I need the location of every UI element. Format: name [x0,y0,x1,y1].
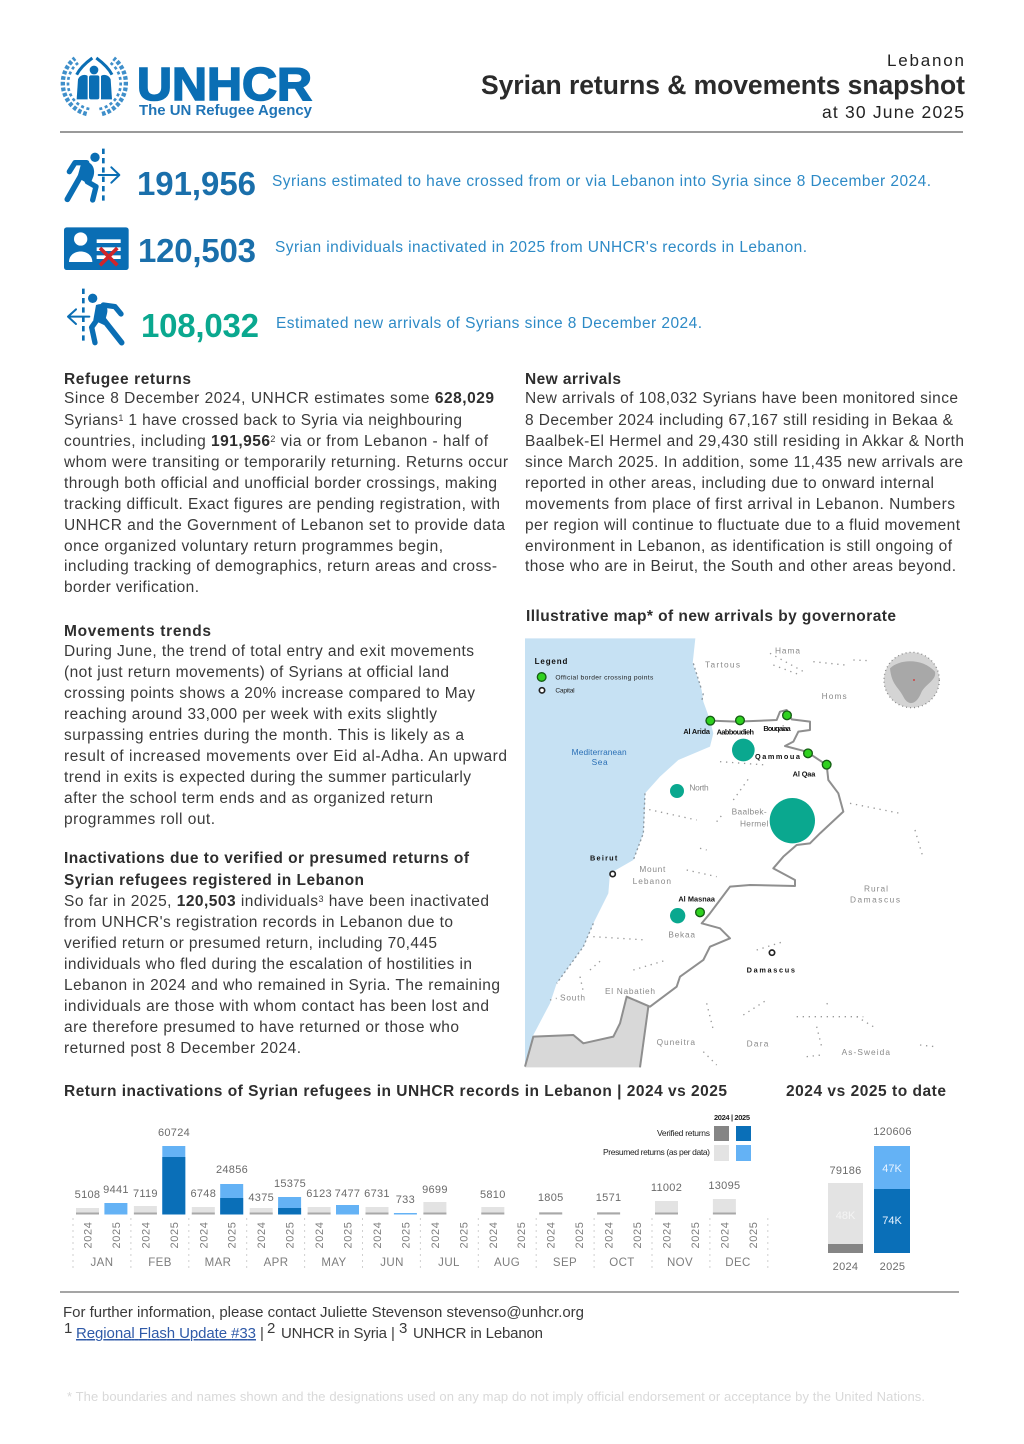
text block: new arrivals: those who are in Beirut, the South and other areas beyond. [525,558,956,575]
text block: refugee returns: tracking difficult. Exact figures are pending registration, with [64,496,500,513]
map legend [535,657,654,695]
month axis labels: APR [264,1257,288,1269]
map legend: Legend [535,657,567,666]
place labels: Mediterranean [572,747,627,757]
value labels: 6123 [306,1188,332,1200]
text block: inactivations [64,850,500,1057]
year axis labels: 2024 [719,1222,731,1248]
place labels: Quneitra [657,1037,695,1047]
place labels: Lebanon [633,876,671,886]
2024 bars [76,1199,736,1214]
totals and years: 2024 [833,1261,858,1273]
value labels: 11002 [651,1182,682,1194]
place labels: Damascus [747,966,795,975]
place labels: Beirut [590,854,618,863]
place labels: Aabboudieh [717,728,755,737]
value labels: 6731 [364,1188,390,1200]
year axis labels: 2024 [256,1222,268,1248]
text block: inactivations: So far in 2025, 120,503 individuals [64,893,318,910]
text block: movements trends: During June, the trend of total entry and exit movements [64,643,474,660]
legend: presumed: Presumed returns (as per data) [603,1147,710,1157]
text block: new arrivals: 8 December 2024 including 67,167 still residing in Bekaa & [525,412,954,429]
totals and years: 2025 [880,1261,905,1273]
text block: refugee returns: Since 8 December 2024, UNHCR estimates some 628,029 [64,390,494,407]
year axis labels: 2025 [516,1222,528,1248]
place labels: Dara [747,1039,769,1049]
footnotes: UNHCR in Lebanon [413,1325,543,1342]
month axis labels: NOV [667,1257,693,1269]
value labels [75,1127,740,1206]
text block: movements trends: result of increased movements over Eid al-Adha. An upward [64,748,507,765]
text block: new arrivals: since March 2025. In addition, some 11,435 new arrivals are [525,454,963,471]
text block: refugee returns: via or from Lebanon - half of [276,433,489,450]
text block: movements trends [64,623,507,828]
place labels: Damascus [850,895,900,905]
bar 2024 [828,1183,863,1253]
number: 120,503 [138,232,256,269]
description: Syrian individuals inactivated in 2025 from UNHCR's records in Lebanon. [275,239,807,256]
header: UNHCR logo [63,58,313,119]
value labels: 9699 [422,1184,448,1196]
text block: new arrivals: New arrivals of 108,032 Syrians have been monitored since [525,390,958,407]
heading: New arrivals [525,371,621,388]
year axis labels: 2024 [604,1222,616,1248]
month axis labels: DEC [725,1257,751,1269]
year axis labels: 2024 [430,1222,442,1248]
map: new arrivals by governorate [525,638,939,1067]
stacked chart: 2024 vs 2025 to date: 74K [882,1215,902,1227]
text block: movements trends: trend in exits is expected during the summer particularly [64,769,471,786]
text block: refugee returns: 2 [270,434,275,444]
year axis labels: 2025 [285,1222,297,1248]
place labels: North [689,783,709,793]
logo emblem: wreath and sheltering hands [63,58,126,114]
month axis labels: JUN [380,1257,404,1269]
2025 presumed returns [104,1146,417,1214]
footnote 2: 2 [267,1320,275,1337]
text block: movements trends: after the school term ends and as organized return [64,790,433,807]
text block: refugee returns: including tracking of demographics, return areas and cross- [64,558,497,575]
text block: new arrivals [525,371,964,575]
icon: person crossing border inward [68,289,122,344]
place labels: Al Qaa [793,769,816,778]
footnote 1: 1 [64,1320,72,1337]
place labels: Al Masnaa [678,895,716,904]
stacked chart: 2024 vs 2025 to date [828,1126,912,1273]
map legend: Official border crossing points [555,674,654,681]
capitals [539,688,775,955]
text block: inactivations: returned post 8 December 2024. [64,1040,301,1057]
stacked chart: 2024 vs 2025 to date: 47K [882,1163,902,1175]
heading: Movements trends [64,623,211,640]
country: Lebanon [887,51,964,70]
text block: new arrivals: movements from place of first arrival in Lebanon. Numbers [525,496,955,513]
footnotes [64,1320,543,1342]
footnotes: UNHCR in Syria [281,1325,388,1342]
legend: verified: Verified returns [657,1128,710,1138]
map disclaimer: * The boundaries and names shown and the designations used on any map do not imply official endorsement or acceptance by the United Nations. [67,1389,925,1404]
icon: person crossing border outward [67,149,119,203]
text block: refugee returns: through both official and unofficial border crossings, making [64,475,497,492]
year axis labels: 2025 [748,1222,760,1248]
year axis labels: 2025 [458,1222,470,1248]
date: at 30 June 2025 [822,102,964,122]
place labels: Tartous [705,659,740,669]
totals and years: 79186 [829,1165,862,1177]
text block: inactivations: individuals are those with whom contact has been lost and [64,998,489,1015]
place labels: Bouqaiaa [763,724,792,733]
report title: Syrian returns & movements snapshot [481,70,965,100]
month axis labels: MAR [205,1257,231,1269]
month axis labels: SEP [553,1257,577,1269]
text block: inactivations: individuals who fled during the escalation of hostilities in [64,956,472,973]
description: Syrians estimated to have crossed from or via Lebanon into Syria since 8 December 2024. [272,173,931,190]
value labels: 15375 [274,1178,306,1190]
KPI: new arrivals [68,289,702,344]
year axis labels: 2025 [400,1222,412,1248]
footnotes: | [260,1325,264,1342]
report title block [481,51,965,122]
place labels: As-Sweida [842,1047,890,1057]
sea [525,638,713,1067]
text block: refugee returns: UNHCR and the Government of Lebanon set to provide data [64,517,505,534]
month axis labels: JAN [91,1257,113,1269]
2024 verified returns base [76,1212,736,1214]
value labels: 6748 [190,1188,216,1200]
place labels: Homs [822,691,847,701]
year axis labels: 2024 [82,1222,94,1248]
footnote 3: 3 [399,1320,407,1337]
stacked chart: 2024 vs 2025 to date: 48K [836,1210,856,1222]
year axis labels: 2024 [198,1222,210,1248]
text block: refugee returns: 1 [118,413,123,423]
border [525,710,843,1067]
text block: refugee returns: once organized voluntary return programmes begin, [64,538,443,555]
year axis labels: 2025 [111,1222,123,1248]
value labels: 24856 [216,1164,248,1176]
chart heading: to date: 2024 vs 2025 to date [786,1083,946,1100]
month axis labels: OCT [609,1257,635,1269]
value labels: 733 [396,1194,415,1206]
map legend: Capital [555,688,575,695]
place labels: Al Arida [683,727,711,736]
month axis labels: JUL [438,1257,460,1269]
place labels: Bekaa [668,930,695,940]
text block: inactivations: Lebanon in 2024 and who remained in Syria. The remaining [64,977,500,994]
value labels: 9441 [103,1184,129,1196]
place labels: El Nabatieh [605,986,655,996]
year axis labels: 2024 [662,1222,674,1248]
month axis labels: AUG [494,1257,520,1269]
year axis labels: 2025 [227,1222,239,1248]
text block: new arrivals: environment in Lebanon, as identification is still ongoing of [525,538,953,555]
proportional bubbles [670,739,815,923]
2025 verified returns [162,1157,301,1214]
text block: inactivations: have been inactivated [324,893,489,910]
map heading: Illustrative map* of new arrivals by governorate [526,608,896,625]
heading: Inactivations due to verified or presumed returns of [64,850,470,867]
place labels: South [560,993,585,1003]
text block: new arrivals: reported in other areas, including due to onward internal [525,475,934,492]
place labels: Hermel [740,818,768,828]
icon: ID card with red cross [64,227,129,270]
text block: inactivations: verified return or presumed return, including 70,445 [64,935,437,952]
year axis labels: 2025 [169,1222,181,1248]
globe inset [884,652,939,708]
text block: refugee returns: 1 have crossed back to Syria via neighbouring [124,412,462,429]
text block: movements trends: reaching around 33,000 per week with exits slightly [64,706,437,723]
value labels: 5108 [75,1189,100,1201]
text block: new arrivals: per region will continue to fluctuate due to a fluid movement [525,517,961,534]
chart legend [603,1113,751,1161]
value labels: 60724 [158,1127,190,1139]
text block: movements trends: (not just return movements) of Syrians at official land [64,664,449,681]
text block: movements trends: programmes roll out. [64,811,215,828]
text block: refugee returns: countries, including 191,956 [64,433,270,450]
value labels: 1805 [538,1192,564,1204]
legend header: 2024 | 2025 [714,1113,750,1122]
month axis labels [91,1257,751,1269]
text block: inactivations: are therefore presumed to have returned or those who [64,1019,459,1036]
text block: refugee returns: border verification. [64,579,199,596]
number: 191,956 [137,165,256,202]
year axis labels: 2025 [632,1222,644,1248]
text block: refugee returns: whom were transiting or temporarily returning. Returns occur [63,454,508,471]
number: 108,032 [141,307,259,344]
year axis labels: 2025 [690,1222,702,1248]
KPI: inactivated individuals [64,227,807,270]
bar chart: monthly inactivations [73,1127,768,1272]
totals and years [829,1126,912,1273]
text block: refugee returns: Syrians [64,412,118,429]
year axis labels: 2024 [372,1222,384,1248]
place labels: Hama [775,645,800,655]
value labels: 7477 [335,1188,360,1200]
month axis labels: MAY [321,1257,347,1269]
contact line: For further information, please contact Juliette Stevenson stevenso@unhcr.org [63,1304,584,1321]
year axis labels: 2024 [314,1222,326,1248]
month axis labels: FEB [148,1257,172,1269]
logo wordmark: UNHCR [137,58,312,110]
bar 2025 [874,1146,910,1189]
year axis labels: 2025 [574,1222,586,1248]
KPI: returns to Syria [67,149,931,203]
place labels [560,645,900,1057]
place labels: Sea [592,757,608,767]
text block: inactivations: 3 [318,894,323,904]
year axis labels: 2024 [140,1222,152,1248]
neighbouring territory [525,997,648,1067]
year axis labels: 2025 [342,1222,354,1248]
totals and years: 120606 [873,1126,912,1138]
place labels: Mount [639,864,666,874]
text block: movements trends: crossing points shows a 20% increase compared to May [64,685,475,702]
year axis labels [82,1222,760,1248]
year axis labels: 2024 [488,1222,500,1248]
footnotes: | [391,1325,395,1342]
value labels: 13095 [708,1180,740,1192]
text block: new arrivals: Baalbek-El Hermel and 29,430 still residing in Akkar & North [525,433,964,450]
logo tagline: The UN Refugee Agency [139,102,313,119]
value labels: 4375 [248,1192,274,1204]
text block: movements trends: surpassing entries during the month. This is likely as a [64,727,464,744]
heading: Refugee returns [64,371,191,388]
value labels: 1571 [596,1192,621,1204]
chart heading: monthly: Return inactivations of Syrian refugees in UNHCR records in Lebanon | 2024 vs 2025 [64,1083,727,1100]
place labels: Qammoua [755,752,801,761]
border crossing points [537,673,831,917]
value labels: 7119 [133,1188,158,1200]
place labels: Rural [864,884,888,894]
text block: refugee returns [63,371,508,596]
footnotes: Regional Flash Update #33 [76,1325,256,1342]
description: Estimated new arrivals of Syrians since 8 December 2024. [276,315,702,332]
text block: inactivations: from UNHCR's registration records in Lebanon due to [64,914,453,931]
value labels: 5810 [480,1189,506,1201]
year axis labels: 2024 [546,1222,558,1248]
text block: inactivations: Syrian refugees registered in Lebanon [64,872,364,889]
place labels: Baalbek- [732,806,767,816]
